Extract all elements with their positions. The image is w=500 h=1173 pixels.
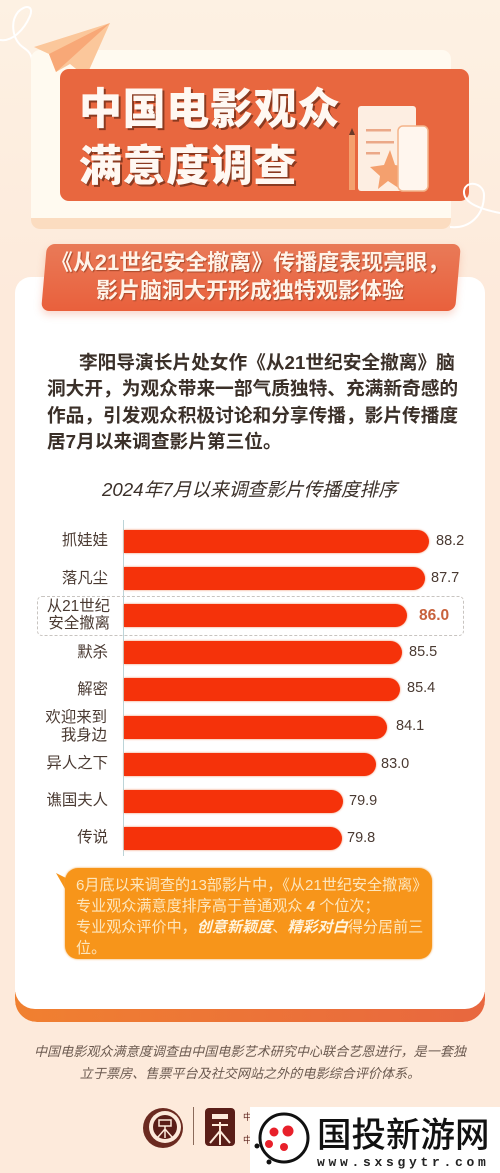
body paragraph: 洞大开，为观众带来一部气质独特、充满新奇感的 xyxy=(47,378,458,399)
logos: 中 xyxy=(243,1110,252,1123)
body paragraph: 作品，引发观众积极讨论和分享传播，影片传播度 xyxy=(47,405,458,426)
bar: 异人之下 xyxy=(46,752,409,778)
bar: 默杀 xyxy=(77,640,437,666)
title text: 中国电影观众 xyxy=(79,75,341,137)
bar chart: 安全撤离 xyxy=(48,615,110,632)
logos: 中 xyxy=(243,1133,252,1146)
background gradient xyxy=(0,0,500,300)
subtitle banner xyxy=(41,244,461,311)
bar chart: 解密 xyxy=(77,681,108,698)
header card xyxy=(31,50,451,229)
footer note: 中国电影观众满意度调查由中国电影艺术研究中心联合艺恩进行，是一套独 xyxy=(34,1044,466,1059)
body paragraph: 李阳导演长片处女作《从21世纪安全撤离》脑 xyxy=(79,352,455,373)
bar chart: 异人之下 xyxy=(46,755,108,772)
title text xyxy=(79,75,341,194)
watermark name: 国投新游网 xyxy=(317,1117,490,1155)
bar chart: 79.9 xyxy=(349,793,377,809)
subtitle text: 《从21世纪安全撤离》传播度表现亮眼， xyxy=(51,250,449,275)
bar chart: 83.0 xyxy=(381,756,409,772)
bar chart: 谯国夫人 xyxy=(46,792,108,809)
callout text: 6月底以来调查的13部影片中，《从21世纪安全撤离》 xyxy=(76,877,427,894)
bar chart: 抓娃娃 xyxy=(62,532,108,549)
bar chart: 85.4 xyxy=(407,680,435,696)
bar chart: 默杀 xyxy=(77,644,108,661)
subtitle text xyxy=(51,250,449,303)
decorative curl: right xyxy=(450,182,500,228)
chart title: 2024年7月以来调查影片传播度排序 xyxy=(102,479,397,500)
title panel xyxy=(60,69,469,201)
bar chart: 落凡尘 xyxy=(62,570,108,587)
bar: 落凡尘 xyxy=(62,566,459,592)
main white panel xyxy=(15,992,485,1022)
watermark url: www.sxsgytr.com xyxy=(317,1155,490,1170)
bar: 传说 xyxy=(77,826,375,852)
callout xyxy=(56,866,434,961)
watermark xyxy=(250,1107,500,1173)
highlight box xyxy=(37,596,464,636)
callout text xyxy=(76,876,427,957)
icon: ladybug xyxy=(254,1112,310,1164)
bar chart: 我身边 xyxy=(61,727,107,744)
bar chart xyxy=(37,520,464,856)
callout text: 专业观众评价中，创意新颖度、精彩对白得分居前三 xyxy=(76,919,423,936)
bar: 欢迎来到我身边 xyxy=(45,708,424,744)
logos xyxy=(143,1107,252,1148)
bar chart: 84.1 xyxy=(396,718,424,734)
title text: 满意度调查 xyxy=(79,132,297,194)
bar chart: 85.5 xyxy=(409,644,437,660)
footer note: 立于票房、售票平台及社交网站之外的电影综合评价体系。 xyxy=(80,1066,420,1081)
body paragraph xyxy=(47,352,458,452)
icon: survey document and phone xyxy=(349,106,429,192)
decorative curl: top left xyxy=(0,6,32,60)
bar chart: 传说 xyxy=(77,829,108,846)
bar chart: 79.8 xyxy=(347,830,375,846)
bar: 解密 xyxy=(77,676,435,702)
white panel body xyxy=(15,277,485,1009)
body paragraph: 居7月以来调查影片第三位。 xyxy=(47,431,282,452)
bar chart: 从21世纪 xyxy=(47,598,110,615)
bar chart: 欢迎来到 xyxy=(45,709,107,726)
icon: paper plane xyxy=(34,23,110,72)
footer note xyxy=(34,1044,467,1081)
bar: 谯国夫人 xyxy=(46,788,377,814)
callout text: 位。 xyxy=(76,940,106,957)
bar chart: 86.0 xyxy=(419,607,449,624)
bar chart: 87.7 xyxy=(431,570,459,586)
bar: 从21世纪安全撤离 xyxy=(47,598,449,632)
callout text: 专业观众满意度排序高于普通观众 4 个位次； xyxy=(76,898,380,915)
subtitle text: 影片脑洞大开形成独特观影体验 xyxy=(96,278,404,303)
bar chart: 88.2 xyxy=(436,533,464,549)
bar: 抓娃娃 xyxy=(62,528,464,554)
